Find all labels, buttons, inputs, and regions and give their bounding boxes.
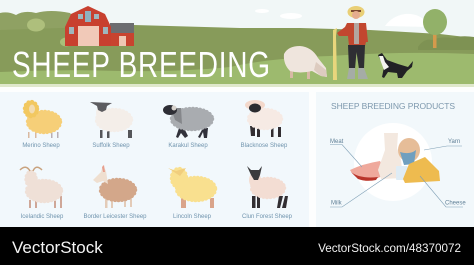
label: Border Leicester: Border Leicester Sheep xyxy=(83,214,147,220)
sheep: Merino xyxy=(25,102,60,138)
label: Lincoln: Lincoln Sheep xyxy=(173,214,212,220)
icon: grazing sheep xyxy=(284,46,327,79)
label: Blacknose: Blacknose Sheep xyxy=(241,143,288,149)
icon: milk bottle xyxy=(378,133,403,179)
icon: red barn xyxy=(65,6,134,46)
watermark logo text: VectorStock xyxy=(12,238,103,257)
sheep: Karakul xyxy=(163,105,212,138)
title: SHEEP BREEDING xyxy=(12,45,270,85)
callout: Meat: Meat xyxy=(330,139,344,145)
callout: Cheese xyxy=(420,176,466,207)
label: Suffolk: Suffolk Sheep xyxy=(92,143,130,149)
watermark bar xyxy=(0,227,474,265)
products group xyxy=(350,133,440,183)
icon: milk glass xyxy=(396,166,408,180)
sheep: Blacknose xyxy=(245,100,281,137)
label: Merino: Merino Sheep xyxy=(22,143,60,149)
sheep: Lincoln xyxy=(168,168,215,208)
callout: Yarn: Yarn xyxy=(448,139,460,145)
sheep: Border Leicester xyxy=(93,165,135,208)
callout: Yarn xyxy=(424,139,462,150)
white circle backdrop xyxy=(354,123,432,201)
label: Karakul: Karakul Sheep xyxy=(168,143,208,149)
watermark url: VectorStock.com/48370072 xyxy=(318,242,461,255)
callout: Cheese: Cheese xyxy=(445,200,466,206)
panel: sheep breeding products xyxy=(316,92,474,227)
panel: sheep breeds xyxy=(0,92,309,227)
icon: cheese xyxy=(403,157,440,183)
icon: tree xyxy=(423,9,447,48)
callout: Milk: Milk xyxy=(331,200,343,206)
sheep: Icelandic xyxy=(20,167,62,208)
icon: meat xyxy=(350,161,386,181)
callout: Meat xyxy=(330,139,362,167)
icon: yarn xyxy=(398,138,420,165)
icon: farmer with staff xyxy=(333,6,368,80)
label: Icelandic: Icelandic Sheep xyxy=(21,214,64,220)
heading: products: SHEEP BREEDING PRODUCTS xyxy=(331,101,455,111)
icon: sheepdog xyxy=(378,53,413,78)
sheep: Clun Forest xyxy=(247,166,288,208)
banner: farm landscape xyxy=(0,0,474,87)
callout: Milk xyxy=(330,173,392,207)
label: Clun Forest: Clun Forest Sheep xyxy=(242,214,293,220)
sheep: Suffolk xyxy=(90,102,132,138)
